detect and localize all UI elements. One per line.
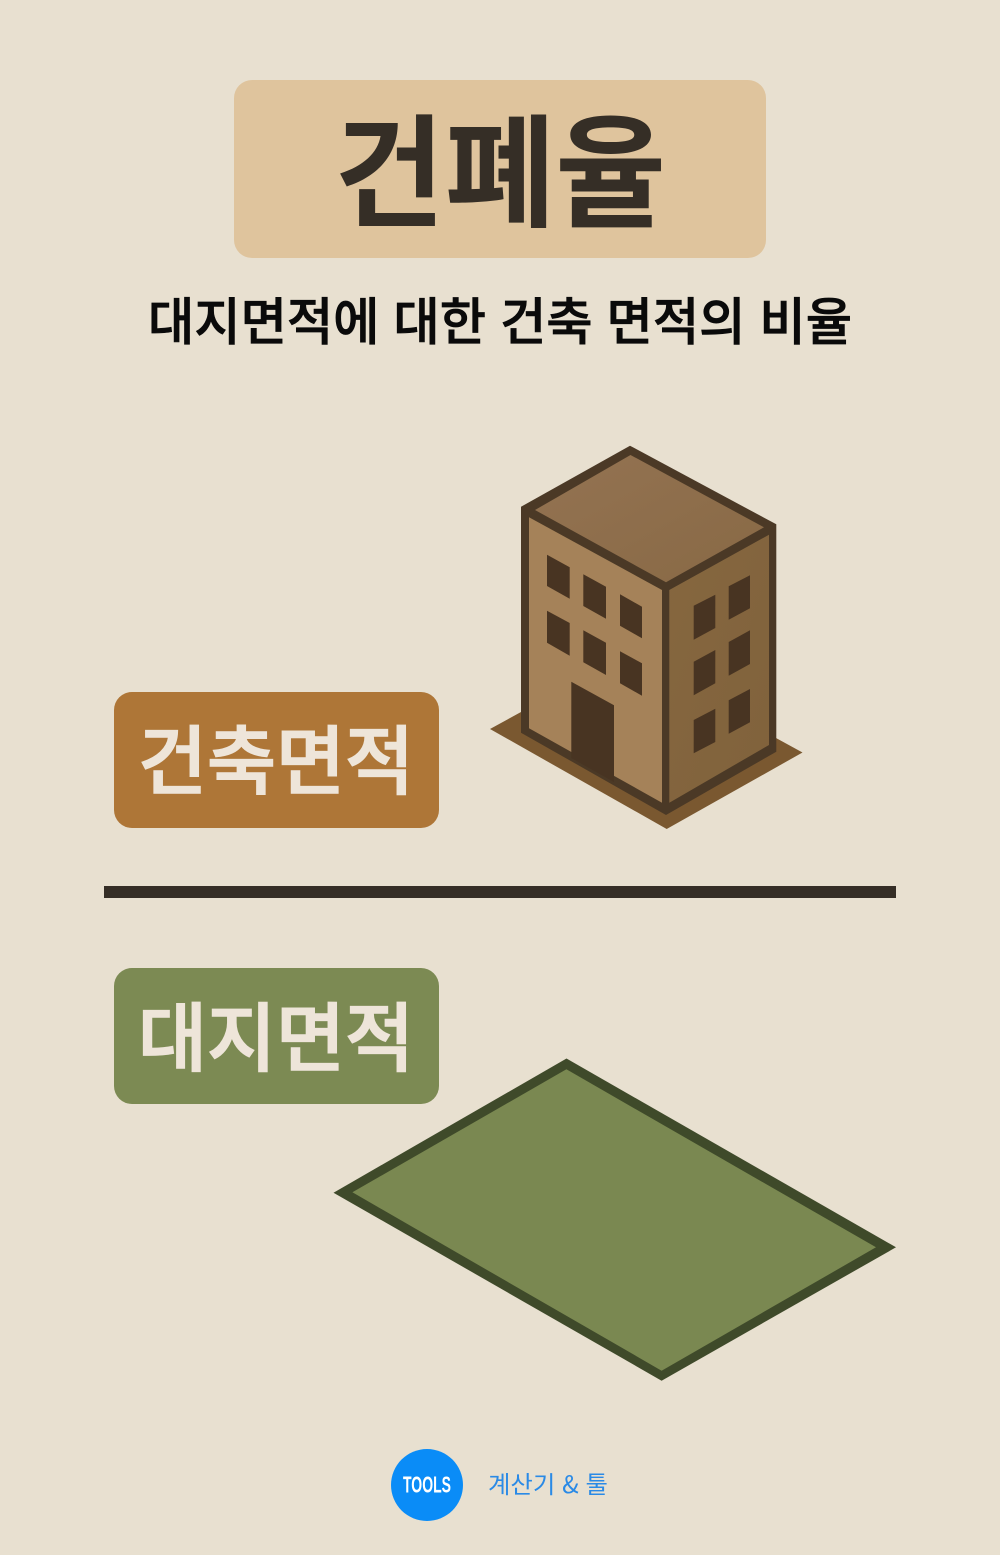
icon: isometric land plot: [334, 1058, 896, 1381]
logo text: TOOLS: [403, 1472, 451, 1498]
right wall windows: [694, 575, 750, 753]
icon: isometric building: [490, 446, 802, 829]
fraction divider: [104, 886, 896, 898]
building ground plot: [490, 712, 802, 829]
title: 건폐율: [334, 107, 666, 243]
label: site area: [114, 968, 439, 1104]
building roof: [535, 455, 764, 582]
title: [234, 80, 766, 258]
left wall windows: [547, 555, 642, 696]
label: site area: 대지면적: [138, 997, 414, 1081]
logo circle: [391, 1449, 463, 1521]
label: building area: [114, 692, 439, 828]
footer logo: [391, 1449, 463, 1521]
subtitle: 대지면적에 대한 건축 면적의 비율: [148, 294, 852, 351]
building left wall: [529, 517, 662, 803]
building outline: [521, 446, 776, 815]
building door: [571, 682, 614, 782]
building right wall: [669, 535, 769, 803]
footer text: 계산기 & 툴: [488, 1465, 608, 1500]
label: building area: 건축면적: [138, 720, 414, 804]
